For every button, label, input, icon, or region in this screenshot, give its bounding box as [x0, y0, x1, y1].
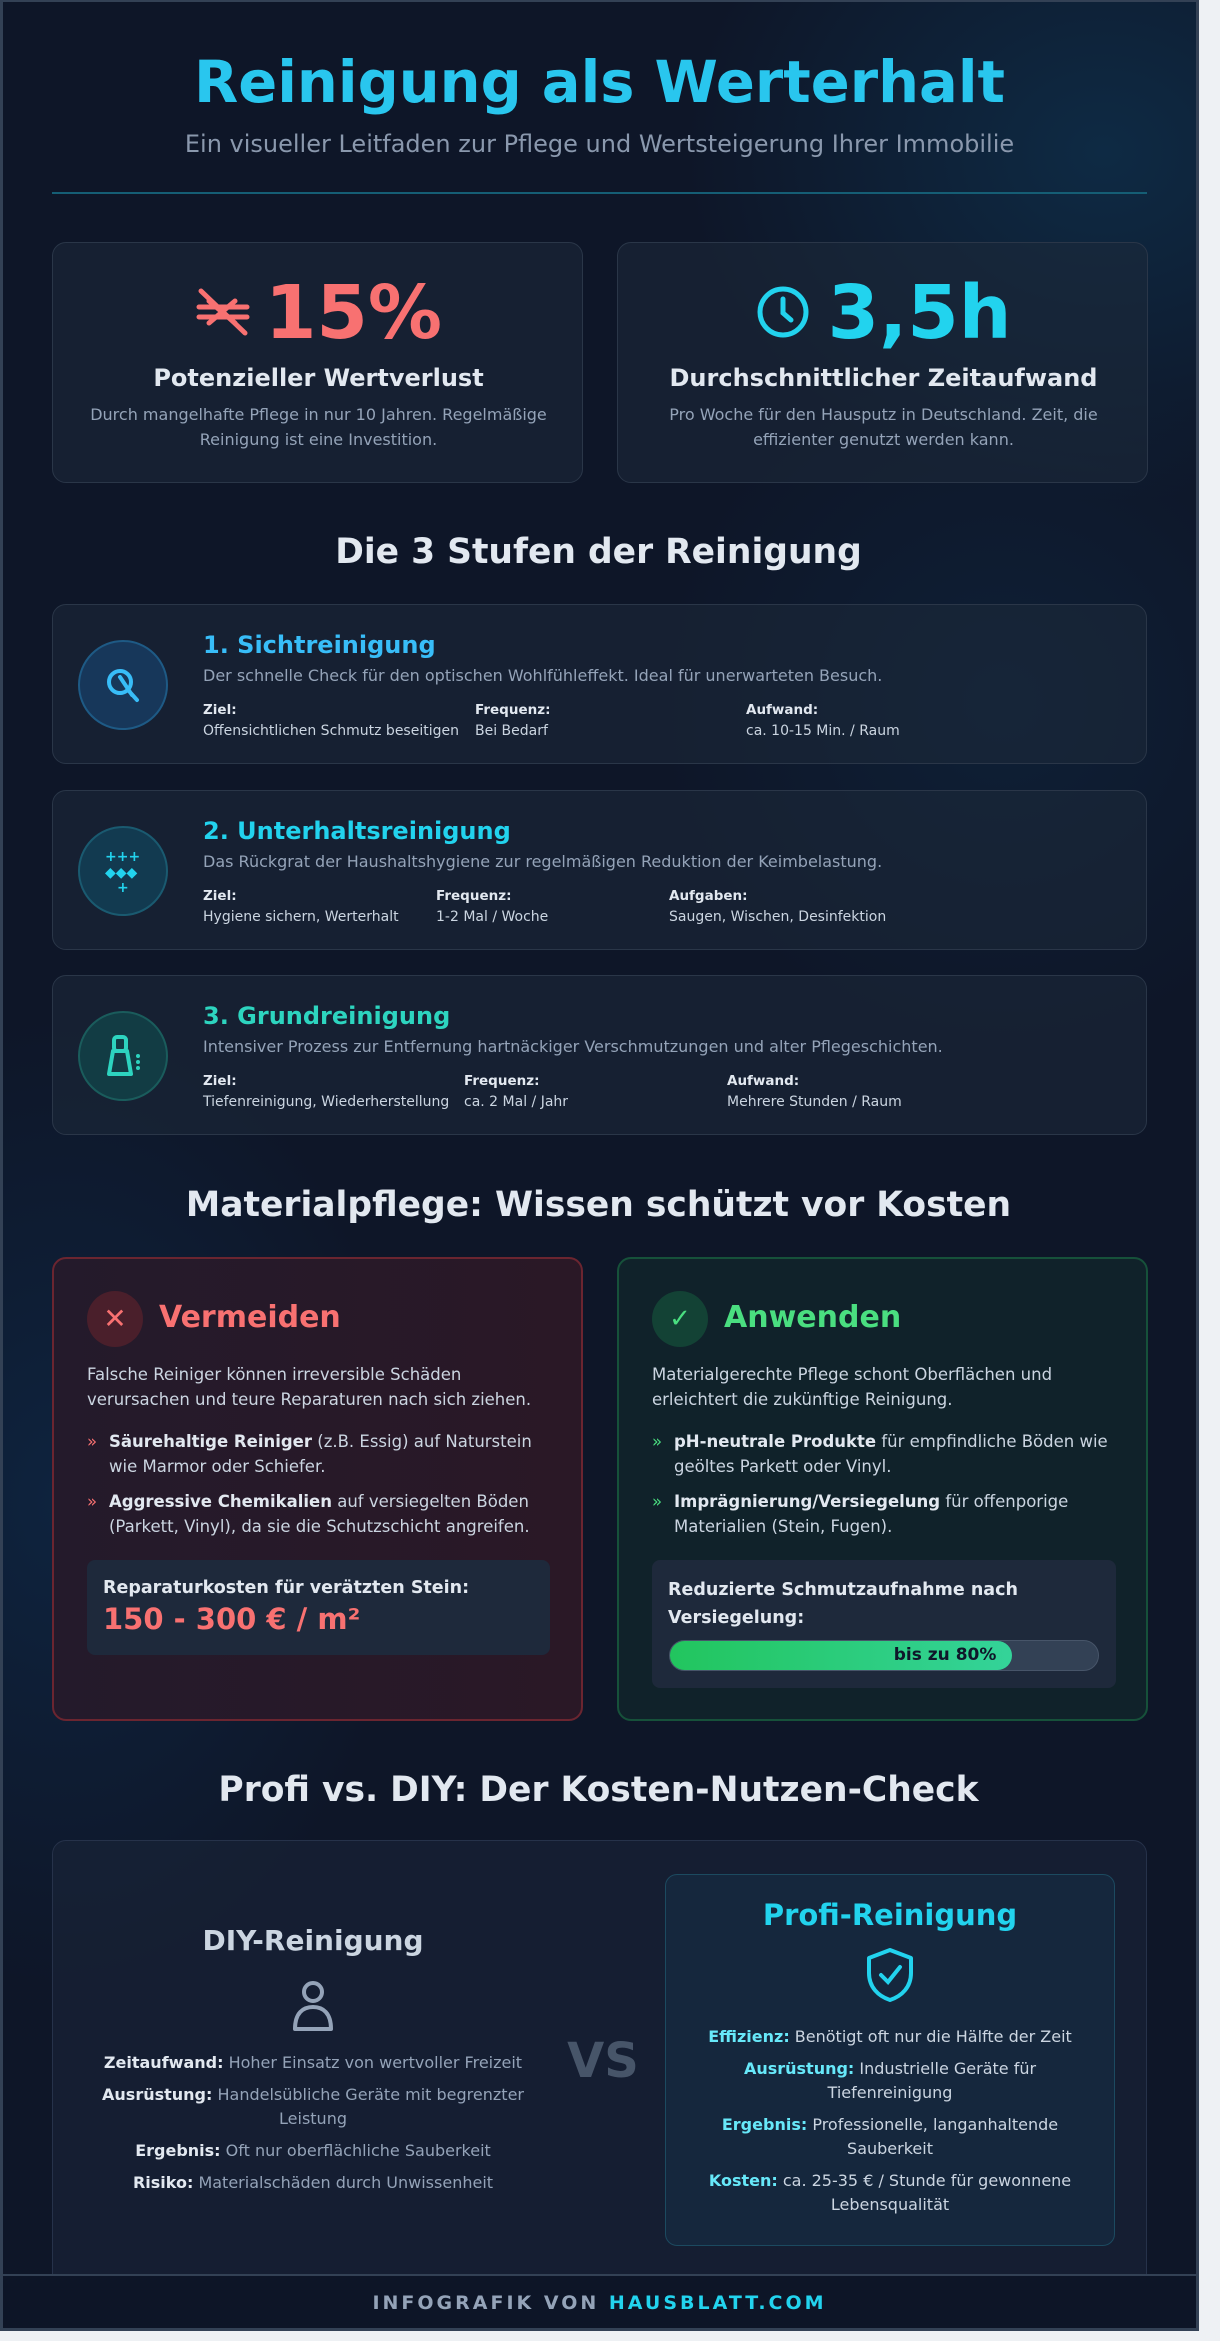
icon: x	[87, 1291, 143, 1347]
bar chart: 80%	[669, 1640, 1099, 1671]
stage details: Ziel:	[203, 702, 237, 718]
icon: check	[652, 1291, 708, 1347]
icon: sparkles: ◆◆◆	[105, 865, 138, 881]
icon: person	[293, 1981, 333, 2031]
panel: comparison	[52, 1840, 1147, 2300]
heading: material care: Materialpflege: Wissen schützt vor Kosten	[186, 1185, 1011, 1225]
progress bar callout: Reduzierte Schmutzaufnahme nach Versiegelung:	[668, 1580, 1018, 1628]
footer: INFOGRAFIK VON HAUSBLATT.COM	[372, 2292, 827, 2314]
stage details: Mehrere Stunden / Raum	[727, 1094, 902, 1110]
panel: stat time	[617, 242, 1148, 483]
DIY column: Risiko: Materialschäden durch Unwissenheit	[133, 2173, 493, 2192]
stat number 3,5h: 3,5h	[828, 270, 1011, 356]
stat heading: Potenzieller Wertverlust	[153, 364, 484, 392]
panel: stage 1	[52, 604, 1147, 764]
stage details: Frequenz:	[436, 888, 511, 904]
stage details: Offensichtlichen Schmutz beseitigen	[203, 723, 459, 739]
stage details	[202, 1073, 902, 1110]
bar chart: 80%: bis zu 80%	[894, 1645, 996, 1665]
stat description: Pro Woche für den Hausputz in Deutschland. Zeit, die effizienter genutzt werden kann.	[669, 405, 1098, 449]
stage details: Frequenz:	[464, 1073, 539, 1089]
stage details: Hygiene sichern, Werterhalt	[203, 909, 399, 925]
panel: stage 2: Das Rückgrat der Haushaltshygiene zur regelmäßigen Reduktion der Keimbelastung.	[203, 852, 882, 871]
footer	[3, 2274, 1196, 2331]
callout: repair cost: 150 - 300 € / m²	[103, 1602, 360, 1636]
panel: avoid	[52, 1257, 583, 1721]
stage details: Ziel:	[203, 1073, 237, 1089]
stage title: 3. Grundreinigung	[203, 1002, 450, 1030]
stage title: 1. Sichtreinigung	[203, 631, 436, 659]
DIY column: Ausrüstung: Handelsübliche Geräte mit begrenzter Leistung	[102, 2085, 524, 2128]
avoid bullets: Aggressive Chemikalien auf versiegelten Böden (Parkett, Vinyl), da sie die Schutzschicht angreifen.	[109, 1492, 530, 1536]
avoid bullets: Säurehaltige Reiniger (z.B. Essig) auf Naturstein wie Marmor oder Schiefer.	[109, 1432, 532, 1476]
panel: stage 3: Intensiver Prozess zur Entfernung hartnäckiger Verschmutzungen und alter Pflegeschichten.	[203, 1037, 943, 1056]
stage details	[203, 888, 886, 925]
stat description: Durch mangelhafte Pflege in nur 10 Jahren. Regelmäßige Reinigung ist eine Investition.	[90, 405, 547, 449]
progress bar callout	[652, 1560, 1116, 1688]
stage details	[203, 702, 900, 739]
stage details: Aufgaben:	[669, 888, 748, 904]
avoid bullets	[87, 1432, 532, 1536]
Profi column: Ergebnis: Professionelle, langanhaltende Sauberkeit	[722, 2115, 1058, 2158]
apply bullets: »	[652, 1492, 662, 1511]
heading: profi vs diy: Profi vs. DIY: Der Kosten-Nutzen-Check	[218, 1770, 979, 1810]
panel: stat value loss	[52, 242, 583, 483]
avoid title: Vermeiden	[159, 1300, 341, 1335]
panel: avoid: Falsche Reiniger können irreversible Schäden verursachen und teure Reparaturen nach sich ziehen.	[87, 1365, 531, 1409]
apply bullets: Imprägnierung/Versiegelung für offenporige Materialien (Stein, Fugen).	[674, 1492, 1068, 1536]
panel: stage 3	[52, 975, 1147, 1135]
panel: stage 2	[52, 790, 1147, 950]
apply bullets: pH-neutrale Produkte für empfindliche Böden wie geöltes Parkett oder Vinyl.	[674, 1432, 1108, 1476]
stage details: Frequenz:	[475, 702, 550, 718]
callout: repair cost	[87, 1560, 550, 1655]
stat number 15%: 15%	[265, 270, 442, 356]
avoid bullets: »	[87, 1432, 97, 1451]
callout: repair cost: Reparaturkosten für verätzten Stein:	[103, 1578, 469, 1598]
subtitle: Ein visueller Leitfaden zur Pflege und Wertsteigerung Ihrer Immobilie	[185, 130, 1014, 158]
stage details: Ziel:	[203, 888, 237, 904]
stage details: Bei Bedarf	[475, 723, 548, 739]
apply title: Anwenden	[724, 1300, 901, 1335]
DIY column	[102, 1924, 524, 2192]
apply bullets: »	[652, 1432, 662, 1451]
DIY column: DIY-Reinigung	[202, 1924, 424, 1957]
stage details: Aufwand:	[746, 702, 818, 718]
Profi column: Ausrüstung: Industrielle Geräte für Tiefenreinigung	[744, 2059, 1036, 2102]
heading: stages: Die 3 Stufen der Reinigung	[335, 532, 862, 572]
DIY column: Ergebnis: Oft nur oberflächliche Sauberkeit	[135, 2141, 491, 2160]
stage details: Aufwand:	[727, 1073, 799, 1089]
stat heading: Durchschnittlicher Zeitaufwand	[670, 364, 1097, 392]
Profi column	[665, 1874, 1115, 2246]
avoid bullets: »	[87, 1492, 97, 1511]
icon: sparkles	[78, 826, 168, 916]
DIY column: Zeitaufwand: Hoher Einsatz von wertvoller Freizeit	[104, 2053, 522, 2072]
stage title: 2. Unterhaltsreinigung	[203, 817, 511, 845]
icon: magnifier	[78, 640, 168, 730]
panel: apply: Materialgerechte Pflege schont Oberflächen und erleichtert die zukünftige Reinigung.	[652, 1365, 1052, 1409]
icon: sparkles: +++	[105, 849, 140, 865]
Profi column: Profi-Reinigung	[763, 1898, 1017, 1932]
title: Reinigung als Werterhalt	[194, 49, 1005, 116]
Profi column: Effizienz: Benötigt oft nur die Hälfte der Zeit	[708, 2027, 1072, 2046]
icon: x: ✕	[103, 1302, 127, 1335]
stage details: Tiefenreinigung, Wiederherstellung	[203, 1094, 449, 1110]
stage details: ca. 2 Mal / Jahr	[464, 1094, 568, 1110]
stage details: 1-2 Mal / Woche	[436, 909, 548, 925]
icon: check: ✓	[669, 1304, 691, 1334]
vs label: VS	[567, 2033, 639, 2089]
Profi column: Kosten: ca. 25-35 € / Stunde für gewonnene Lebensqualität	[709, 2171, 1071, 2214]
icon: bottle	[78, 1011, 168, 1101]
stage details: ca. 10-15 Min. / Raum	[746, 723, 900, 739]
panel: apply	[617, 1257, 1148, 1721]
stage details: Saugen, Wischen, Desinfektion	[669, 909, 886, 925]
icon: shield	[867, 1948, 913, 2002]
panel: stage 1: Der schnelle Check für den optischen Wohlfühleffekt. Ideal für unerwarteten Besuch.	[203, 666, 882, 685]
apply bullets	[652, 1432, 1108, 1536]
